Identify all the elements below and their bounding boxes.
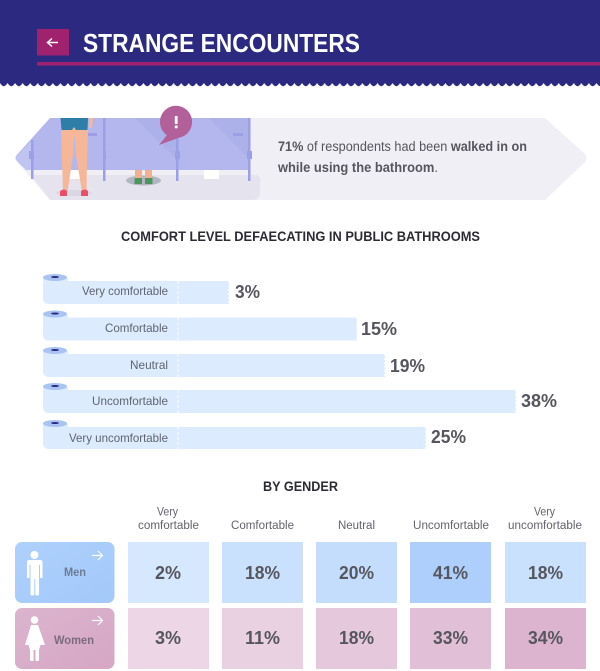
bar: neutral: 19%: [390, 356, 425, 376]
women values: 33%: [433, 628, 468, 648]
bar: comfortable: [43, 310, 397, 340]
bar: comfortable: Comfortable: [105, 321, 168, 335]
bar: uncomfortable: 38%: [521, 391, 557, 411]
column headers: uncomfortable: [508, 520, 582, 532]
bar: uncomfortable: [43, 383, 557, 413]
toilet roll bar chart: [43, 274, 557, 449]
woman's legs: [56, 118, 93, 196]
women values: 11%: [245, 628, 280, 648]
bar: neutral: [43, 347, 425, 377]
illustration: bathroom stalls: [15, 106, 260, 200]
callout text: 71% of respondents had been walked in on: [278, 139, 527, 154]
chart title: COMFORT LEVEL DEFAECATING IN PUBLIC BATHROOMS: [121, 229, 480, 244]
men values: [128, 542, 586, 603]
bar: very comfortable: Very comfortable: [82, 284, 168, 298]
title: STRANGE ENCOUNTERS: [83, 28, 360, 58]
bar: comfortable: 15%: [361, 319, 397, 339]
column headers: Uncomfortable: [413, 520, 489, 532]
women values: 3%: [155, 628, 181, 648]
callout banner: while using the bathroom.: [277, 160, 438, 175]
men values: 2%: [155, 563, 181, 583]
bar: very uncomfortable: 25%: [431, 427, 466, 447]
column headers: Very: [157, 506, 178, 518]
callout banner: [15, 106, 586, 200]
bar: neutral: Neutral: [130, 358, 168, 372]
back button: [37, 29, 69, 56]
women label card: [15, 608, 114, 669]
speech bubble: [159, 106, 192, 145]
gender heading: BY GENDER: [263, 479, 338, 494]
bar: uncomfortable: Uncomfortable: [92, 394, 168, 408]
men values: 20%: [339, 563, 374, 583]
header band: [0, 0, 600, 87]
men values: 41%: [433, 563, 468, 583]
row: men: [15, 542, 586, 603]
men values: 18%: [245, 563, 280, 583]
column headers: Very: [534, 506, 555, 518]
column headers: [138, 506, 582, 532]
men values: 18%: [528, 563, 563, 583]
women values: 18%: [339, 628, 374, 648]
person's feet in stall: [126, 170, 161, 186]
men label card: [15, 542, 114, 603]
column headers: comfortable: [138, 520, 199, 532]
column headers: Comfortable: [231, 520, 294, 532]
women label card: Women: [54, 635, 94, 647]
bar: very comfortable: 3%: [235, 282, 260, 302]
women values: [128, 608, 586, 669]
bar: very uncomfortable: [43, 420, 466, 449]
row: women: [15, 608, 586, 669]
men label card: Men: [64, 567, 86, 579]
bar: very comfortable: [43, 274, 260, 304]
column headers: Neutral: [338, 520, 375, 532]
women values: 34%: [528, 628, 563, 648]
bar: very uncomfortable: Very uncomfortable: [69, 431, 168, 445]
